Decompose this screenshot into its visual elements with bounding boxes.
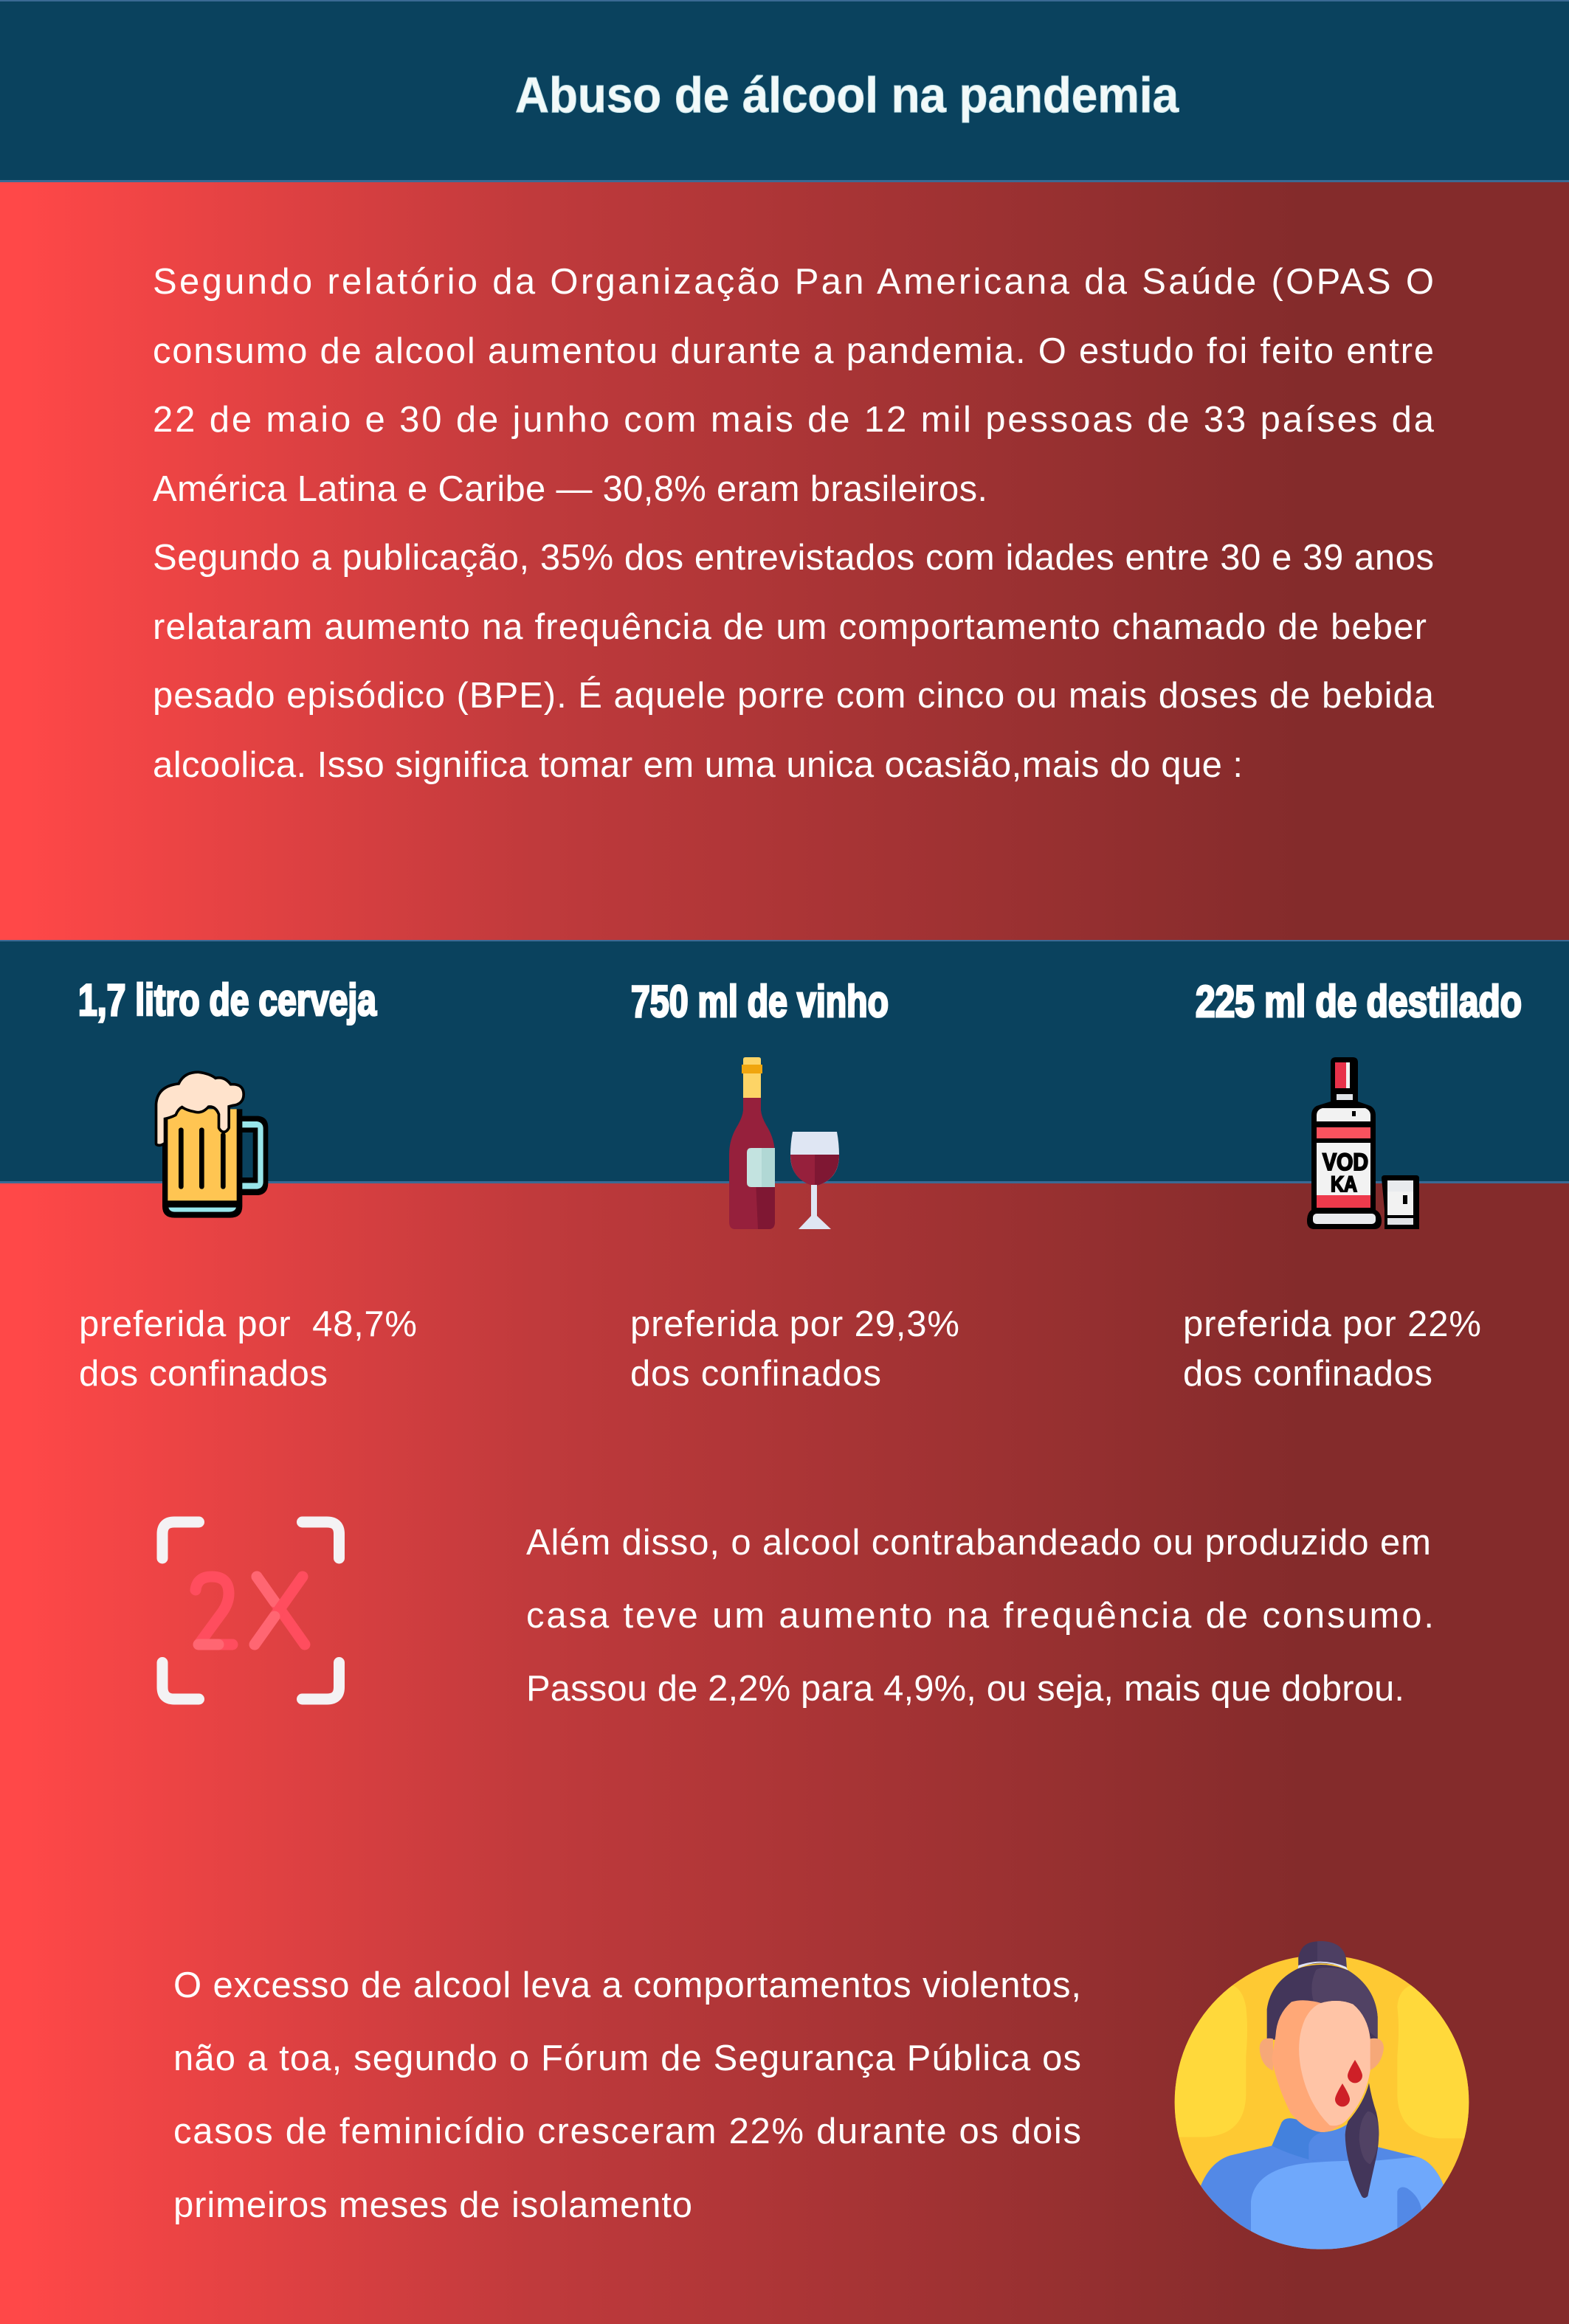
heading: beer amount: 1,7 litro de cerveja	[78, 975, 376, 1025]
icon: vodka bottle and shot glass: KA	[1331, 1172, 1357, 1197]
text block: report introduction: consumo de alcool aumentou durante a pandemia. O estudo foi feito entre	[153, 331, 1434, 371]
text block: contraband alcohol: casa teve um aumento na frequência de consumo.	[526, 1596, 1434, 1636]
text block: violence and femicide: casos de feminicídio cresceram 22% durante os dois	[173, 2112, 1081, 2151]
icon: crying woman portrait	[1166, 1941, 1476, 2263]
text block: report introduction: 22 de maio e 30 de junho com mais de 12 mil pessoas de 33 países da	[153, 400, 1435, 440]
text block: violence and femicide	[173, 1965, 1081, 2225]
text block: report introduction	[153, 262, 1435, 785]
title: Abuso de álcool na pandemia	[515, 67, 1179, 123]
text: vodka label: VOD	[1323, 1149, 1368, 1175]
text: beer preference: preferida por 48,7%	[79, 1304, 417, 1344]
icon: vodka bottle and shot glass	[1307, 1057, 1419, 1229]
text: spirits preference: preferida por 22%	[1183, 1304, 1481, 1344]
text: wine preference: dos confinados	[630, 1354, 881, 1394]
text block: report introduction: Segundo a publicação, 35% dos entrevistados com idades entre 30 e 39 anos	[153, 538, 1434, 578]
text block: contraband alcohol	[526, 1523, 1434, 1709]
text block: violence and femicide: não a toa, segundo o Fórum de Segurança Pública os	[173, 2038, 1081, 2078]
icon: beer mug	[157, 1073, 268, 1218]
icon: blood drops	[1335, 2060, 1362, 2106]
text: spirits preference	[1183, 1304, 1481, 1394]
text: wine preference	[630, 1304, 959, 1394]
panel: title band	[0, 0, 1569, 182]
text block: contraband alcohol: Além disso, o alcool contrabandeado ou produzido em	[526, 1523, 1431, 1563]
text block: contraband alcohol: Passou de 2,2% para 4,9%, ou seja, mais que dobrou.	[526, 1669, 1404, 1709]
text: beer preference	[79, 1304, 417, 1394]
icon: wine bottle and glass	[729, 1057, 839, 1229]
text block: violence and femicide: O excesso de alcool leva a comportamentos violentos,	[173, 1965, 1081, 2005]
text block: report introduction: América Latina e Caribe — 30,8% eram brasileiros.	[153, 469, 987, 509]
text block: report introduction: pesado episódico (BPE). É aquele porre com cinco ou mais doses de bebida	[153, 676, 1435, 716]
text: wine preference: preferida por 29,3%	[630, 1304, 959, 1344]
text block: report introduction: Segundo relatório da Organização Pan Americana da Saúde (OPAS O	[153, 262, 1434, 302]
text: spirits preference: dos confinados	[1183, 1354, 1432, 1394]
text: beer preference: dos confinados	[79, 1354, 328, 1394]
panel: drinks band	[0, 940, 1569, 1183]
text block: violence and femicide: primeiros meses de isolamento	[173, 2185, 692, 2225]
heading: wine amount: 750 ml de vinho	[631, 977, 889, 1026]
text block: report introduction: relataram aumento na frequência de um comportamento chamado de beber	[153, 607, 1427, 647]
icon: 2X frame	[162, 1522, 339, 1699]
text block: report introduction: alcoolica. Isso significa tomar em uma unica ocasião,mais do que :	[153, 745, 1243, 785]
